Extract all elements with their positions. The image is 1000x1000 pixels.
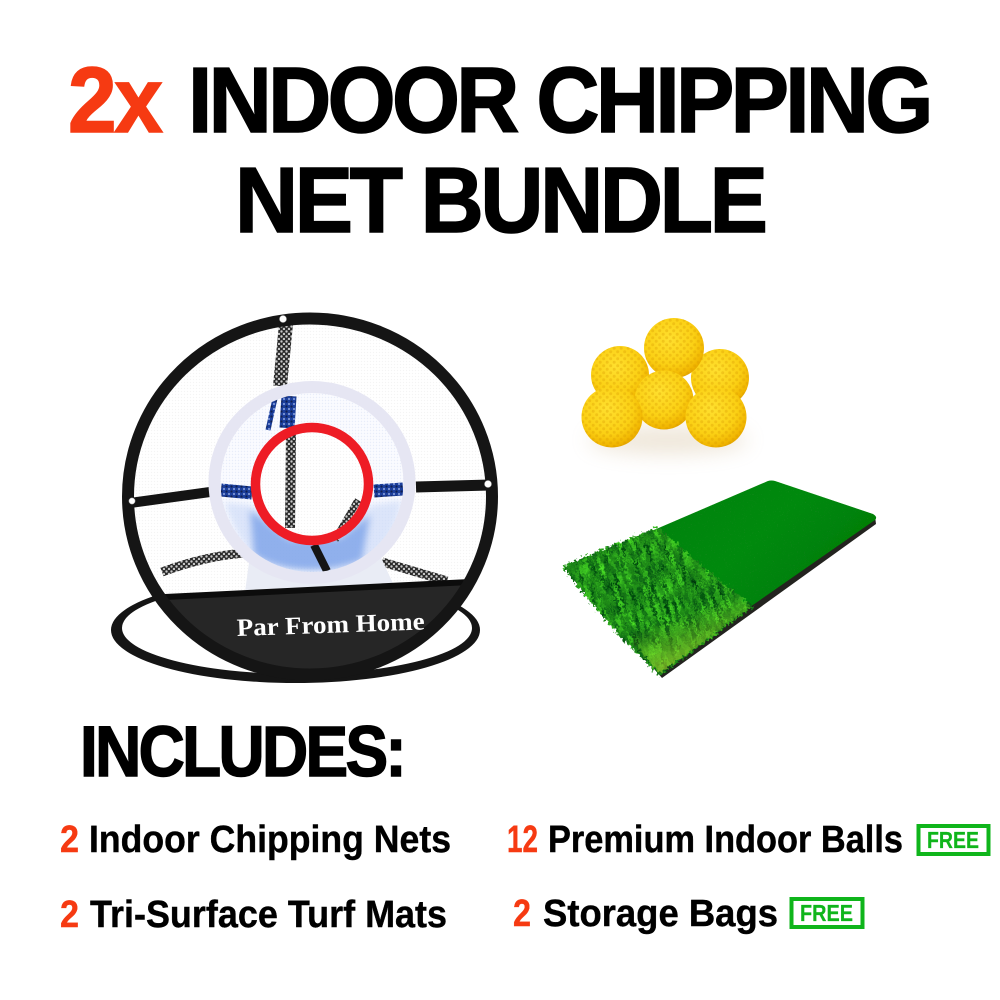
ball front left <box>582 386 642 448</box>
mat base <box>572 516 876 678</box>
item: tri-surface turf mats: Tri-Surface Turf Mats <box>90 894 447 936</box>
item: storage bags: 2 <box>513 893 531 935</box>
turf mat <box>562 480 876 678</box>
title: NET BUNDLE <box>235 149 768 253</box>
ball top <box>644 318 704 378</box>
net pouch <box>246 558 392 590</box>
inner straps <box>287 396 289 428</box>
ball back right <box>691 349 749 407</box>
right strap <box>416 485 490 487</box>
inner target disc <box>213 386 411 580</box>
golf balls <box>582 318 749 454</box>
lower straps <box>162 553 245 572</box>
long grass <box>562 526 755 678</box>
outer hoop <box>128 318 492 674</box>
brand text: Par From Home <box>236 608 425 642</box>
ground ring <box>111 577 480 683</box>
ball middle <box>634 370 694 430</box>
title <box>68 49 933 253</box>
ball back left <box>591 346 649 404</box>
net back mesh <box>128 318 492 674</box>
left strap <box>130 492 210 503</box>
item: storage bags: Storage Bags <box>543 893 778 935</box>
chipping net product <box>111 315 492 690</box>
top strap <box>280 324 286 386</box>
item: premium indoor balls: 12 <box>507 819 538 861</box>
item: indoor chipping nets: Indoor Chipping Nets <box>89 819 451 861</box>
includes heading: INCLUDES: <box>80 713 407 792</box>
free badge: FREE <box>800 900 853 926</box>
item: indoor chipping nets: 2 <box>60 819 79 861</box>
white rim <box>214 387 410 578</box>
item: premium indoor balls: Premium Indoor Balls <box>548 819 903 861</box>
red ring <box>256 428 368 540</box>
item: tri-surface turf mats: 2 <box>60 894 79 936</box>
ball front right <box>686 386 746 448</box>
title: INDOOR CHIPPING <box>188 49 933 153</box>
short turf <box>640 480 876 614</box>
free badge: FREE <box>927 827 979 853</box>
ball shadow <box>588 426 748 454</box>
title: 2x <box>68 49 163 153</box>
hoop eyelets <box>129 315 492 504</box>
lower pocket <box>169 586 460 668</box>
